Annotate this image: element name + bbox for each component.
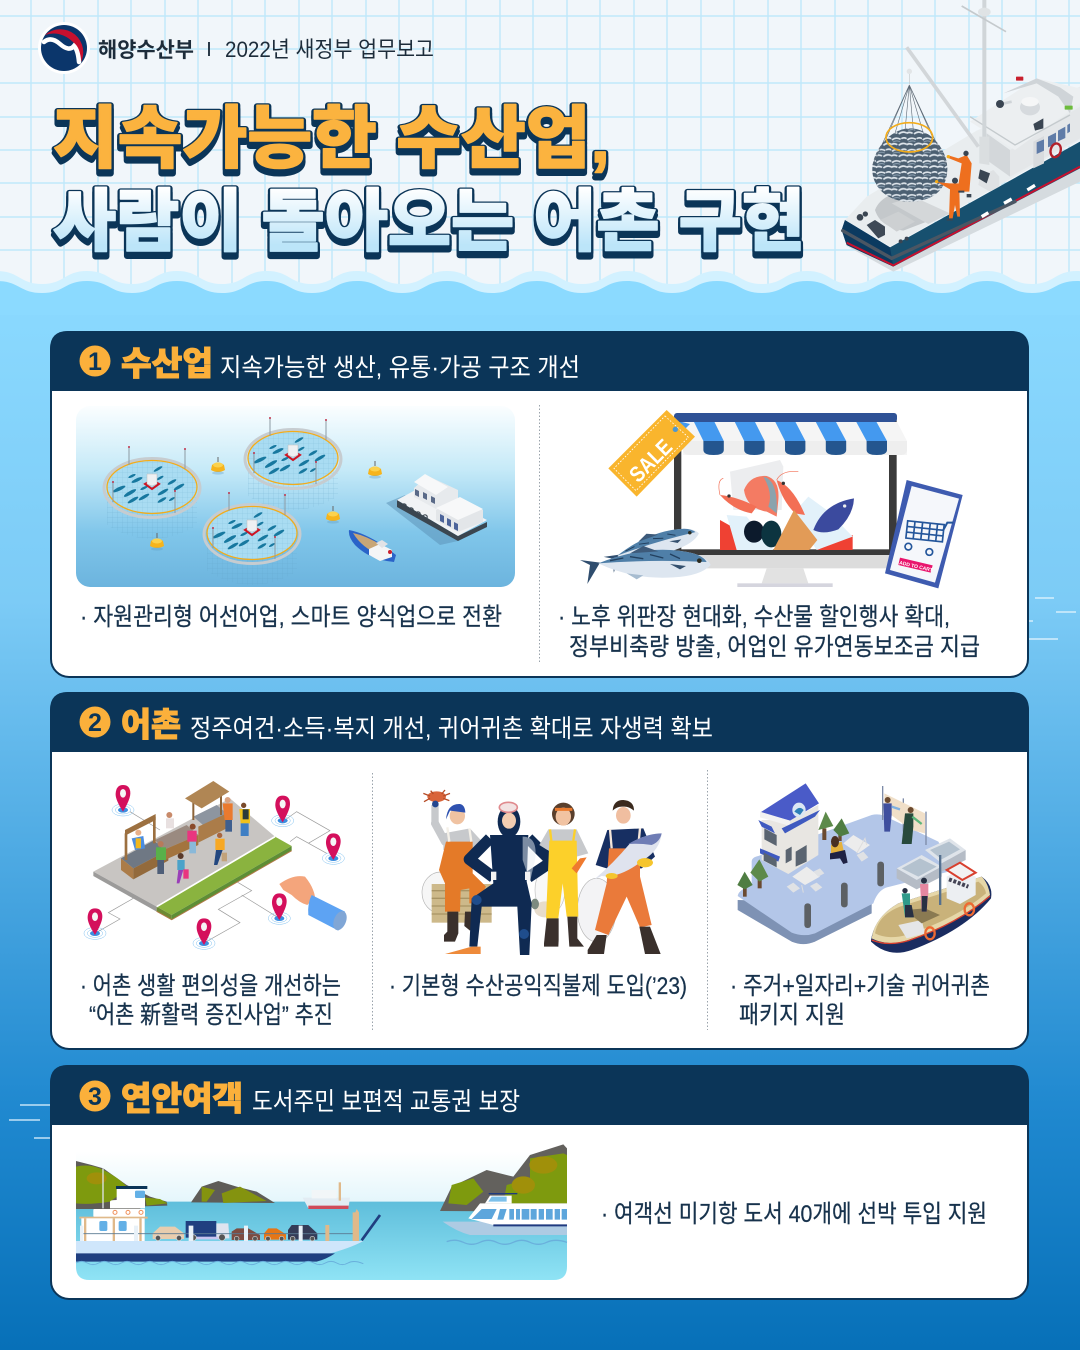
caption: village, line 1: · 어촌 생활 편의성을 개선하는	[80, 972, 341, 1000]
seafood box	[719, 460, 854, 550]
section subtitle: 도서주민 보편적 교통권 보장	[252, 1088, 520, 1116]
caption: market and subsidy, line 2: 정부비축량 방출, 어업인 유가연동보조금 지급	[569, 633, 980, 661]
image: fishers and divers	[422, 790, 662, 955]
left side streaks	[9, 1105, 50, 1138]
panel: 수산업	[50, 331, 1029, 677]
mackerels	[580, 520, 711, 584]
cafe tables and woman	[787, 835, 870, 893]
buoys	[150, 457, 382, 551]
section title: 어촌	[121, 706, 181, 743]
report label: 2022년 새정부 업무보고	[225, 37, 434, 62]
number badge 2	[80, 706, 110, 738]
panel: 연안여객	[50, 1065, 1029, 1299]
small fishing boat	[349, 530, 396, 562]
fishing boat with crew	[871, 855, 991, 953]
header grid background	[0, 0, 1080, 295]
left island	[76, 1161, 168, 1209]
service barge	[386, 474, 487, 545]
ministry name: 해양수산부	[98, 39, 194, 62]
smartphone with cart: ADD TO CART	[899, 560, 933, 574]
right island	[440, 1144, 567, 1212]
location pins	[84, 785, 344, 949]
image: fishing-village market with map pins	[84, 781, 349, 949]
number badge 1	[80, 346, 110, 376]
quay platform	[738, 814, 955, 944]
wave: sea surface	[0, 281, 1080, 315]
car ferry	[76, 1168, 380, 1265]
section title: 연안여객	[121, 1080, 243, 1117]
sky and sea	[76, 1152, 567, 1280]
market stalls	[121, 781, 229, 879]
number badge 3	[80, 1080, 110, 1112]
number badge 2: 2	[88, 709, 102, 737]
deck rail and ramp	[80, 1209, 380, 1241]
SALE price tag	[608, 410, 695, 497]
panel header bar	[50, 692, 1029, 752]
panel: 어촌	[50, 692, 1029, 1049]
vehicles on deck	[153, 1221, 317, 1241]
smartphone with cart	[885, 480, 963, 588]
section title: 수산업	[121, 345, 213, 382]
seaside cafe building	[758, 783, 820, 874]
caption: return-to-farming package, line 2: 패키지 지원	[739, 1001, 845, 1029]
hand placing a pin	[268, 876, 349, 932]
cabin	[970, 77, 1080, 177]
passenger ship	[443, 1193, 567, 1244]
illustration: fishing boat hauling a net	[842, 0, 1080, 272]
diver in wetsuit	[445, 802, 552, 955]
image: online seafood sale	[580, 410, 963, 588]
trees	[737, 812, 849, 897]
title line 1: 지속가능한 수산업,	[53, 106, 610, 182]
crate and nets	[422, 867, 616, 942]
title line 2: 사람이 돌아오는 어촌 구현	[53, 184, 805, 260]
number badge 1: 1	[88, 348, 102, 376]
net pens	[104, 417, 341, 585]
caption: market and subsidy, line 1: · 노후 위판장 현대화, 수산물 할인행사 확대,	[558, 603, 950, 631]
net of fish	[872, 85, 947, 202]
fisher with crab	[423, 790, 486, 942]
store awning	[674, 413, 907, 455]
caption: passenger ship support: · 여객선 미기항 도서 40개에 선박 투입 지원	[601, 1200, 987, 1228]
mast and boom	[907, 0, 1006, 165]
bollards	[804, 862, 884, 928]
caption: village, line 2: “어촌 新활력 증진사업” 추진	[89, 1001, 333, 1029]
panel header bar	[50, 1065, 1029, 1125]
image: island ferries	[76, 1144, 567, 1280]
crew in orange suits	[935, 151, 972, 221]
title line 1: 지속가능한 수산업,	[53, 101, 610, 177]
title line 2: 사람이 돌아오는 어촌 구현	[53, 185, 805, 261]
connector lines	[95, 812, 330, 943]
SALE price tag: SALE	[624, 434, 677, 487]
panel header bar	[50, 331, 1029, 391]
section subtitle: 지속가능한 생산, 유통·가공 구조 개선	[220, 354, 580, 382]
ferry superstructure	[79, 1168, 148, 1241]
middle island	[191, 1181, 275, 1203]
title line 1: 지속가능한 수산업,	[53, 102, 610, 178]
caption: direct payment: · 기본형 수산공익직불제 도입(’23)	[389, 972, 687, 1000]
title	[53, 101, 805, 265]
title line 2: 사람이 돌아오는 어촌 구현	[53, 189, 805, 265]
drying racks and workers	[883, 786, 926, 845]
caption: fish farm: · 자원관리형 어선어업, 스마트 양식업으로 전환	[80, 603, 502, 631]
right side streaks	[1029, 598, 1076, 639]
separator	[208, 42, 210, 56]
distant ship	[303, 1182, 350, 1209]
fisher holding big fish	[588, 800, 662, 954]
monitor	[674, 420, 897, 587]
market plaza	[93, 798, 292, 920]
fisher in yellow overalls	[539, 803, 588, 947]
image: harbor with cafe and boat	[737, 783, 991, 953]
section subtitle: 정주여건·소득·복지 개선, 귀어귀촌 확대로 자생력 확보	[190, 715, 713, 743]
wave: light foam	[0, 271, 1080, 310]
stacked fish crates	[897, 838, 966, 889]
shoppers and vendors	[132, 797, 250, 883]
caption: return-to-farming package, line 1: · 주거+일자리+기술 귀어귀촌	[730, 972, 990, 1000]
logo: Ministry emblem	[38, 22, 90, 74]
image: marine fish farm	[76, 406, 515, 587]
number badge 3: 3	[88, 1083, 102, 1111]
